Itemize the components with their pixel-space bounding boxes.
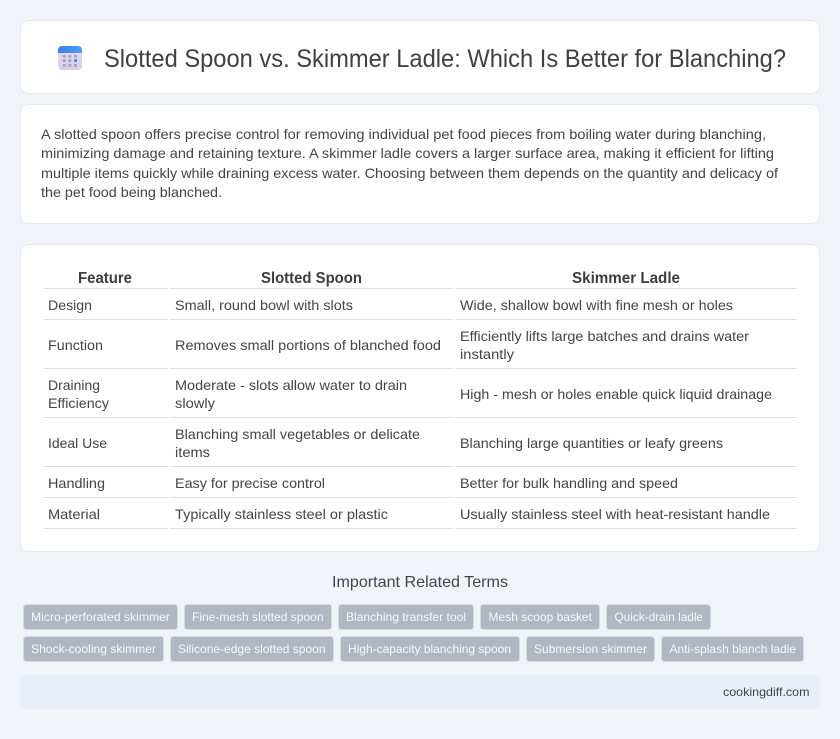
table row: function: Removes small portions of blanched food	[175, 337, 441, 353]
tag	[340, 636, 520, 662]
text block: summary paragraph: the pet food being blanched.	[41, 184, 222, 200]
related terms tags	[24, 604, 804, 662]
footer source text: cookingdiff.com	[723, 685, 810, 699]
table row: design: Wide, shallow bowl with fine mesh or holes	[460, 297, 733, 313]
tag: Fine-mesh slotted spoon	[192, 610, 324, 624]
table row: design	[48, 297, 733, 313]
table row: function	[48, 328, 749, 362]
table header row: Slotted Spoon	[261, 270, 362, 287]
tag	[662, 636, 804, 662]
table row: handling	[48, 475, 678, 491]
table row: material	[48, 506, 770, 522]
tag	[170, 636, 334, 662]
table row: draining efficiency: slowly	[175, 395, 215, 411]
table row: handling: Easy for precise control	[175, 475, 325, 491]
footer bar	[20, 675, 820, 709]
title: Slotted Spoon vs. Skimmer Ladle: Which Is Better for Blanching?	[104, 45, 786, 73]
table row: ideal use: Blanching large quantities or leafy greens	[460, 435, 723, 451]
table row: function: Function	[48, 337, 103, 353]
table row: ideal use: Blanching small vegetables or delicate	[175, 426, 420, 442]
table row: ideal use: Ideal Use	[48, 435, 107, 451]
table row: material: Usually stainless steel with heat-resistant handle	[460, 506, 770, 522]
table header row	[78, 270, 680, 287]
table row: draining efficiency	[48, 377, 772, 411]
table row: draining efficiency: Draining	[48, 377, 100, 393]
table row: design: Design	[48, 297, 92, 313]
tag	[480, 604, 600, 630]
icon: calendar	[58, 46, 82, 70]
table row: design: Small, round bowl with slots	[175, 297, 353, 313]
table row: draining efficiency: Moderate - slots allow water to drain	[175, 377, 407, 393]
text block: summary paragraph: A slotted spoon offers precise control for removing individual pet food pieces from boiling water during blanching,	[41, 126, 766, 142]
tag: Mesh scoop basket	[488, 610, 593, 624]
table header row: Feature	[78, 270, 132, 287]
tag: Submersion skimmer	[534, 642, 647, 656]
table row: handling: Better for bulk handling and speed	[460, 475, 678, 491]
tag: Silicone-edge slotted spoon	[178, 642, 326, 656]
text block: summary paragraph	[41, 126, 778, 200]
heading: important related terms: Important Related Terms	[332, 574, 508, 591]
tag: Quick-drain ladle	[614, 610, 703, 624]
tag	[184, 604, 332, 630]
table row: function: Efficiently lifts large batches and drains water	[460, 328, 749, 344]
table row: material: Material	[48, 506, 100, 522]
tag	[24, 636, 164, 662]
table row: draining efficiency: Efficiency	[48, 395, 109, 411]
tag: Shock-cooling skimmer	[31, 642, 156, 656]
tag	[338, 604, 474, 630]
table row: function: instantly	[460, 346, 514, 362]
panel: comparison table	[20, 244, 820, 552]
tag: Anti-splash blanch ladle	[670, 642, 796, 656]
text block: summary paragraph: multiple items quickly while draining excess water. Choosing between them depends on the quantity and delicacy of	[41, 165, 778, 181]
tag	[526, 636, 654, 662]
panel: introduction	[20, 104, 820, 224]
tag	[24, 604, 178, 630]
table row: handling: Handling	[48, 475, 105, 491]
table row: ideal use	[48, 426, 723, 460]
text block: summary paragraph: minimizing damage and retaining texture. A skimmer ladle covers a larger surface area, making it efficient for lifting	[41, 145, 774, 161]
table header row: Skimmer Ladle	[572, 270, 680, 287]
tag: Micro-perforated skimmer	[31, 610, 170, 624]
table row: draining efficiency: High - mesh or holes enable quick liquid drainage	[460, 386, 772, 402]
panel: title header	[20, 20, 820, 94]
tag: High-capacity blanching spoon	[348, 642, 511, 656]
table row: ideal use: items	[175, 444, 210, 460]
table row: material: Typically stainless steel or plastic	[175, 506, 388, 522]
tag	[606, 604, 710, 630]
tag: Blanching transfer tool	[346, 610, 466, 624]
